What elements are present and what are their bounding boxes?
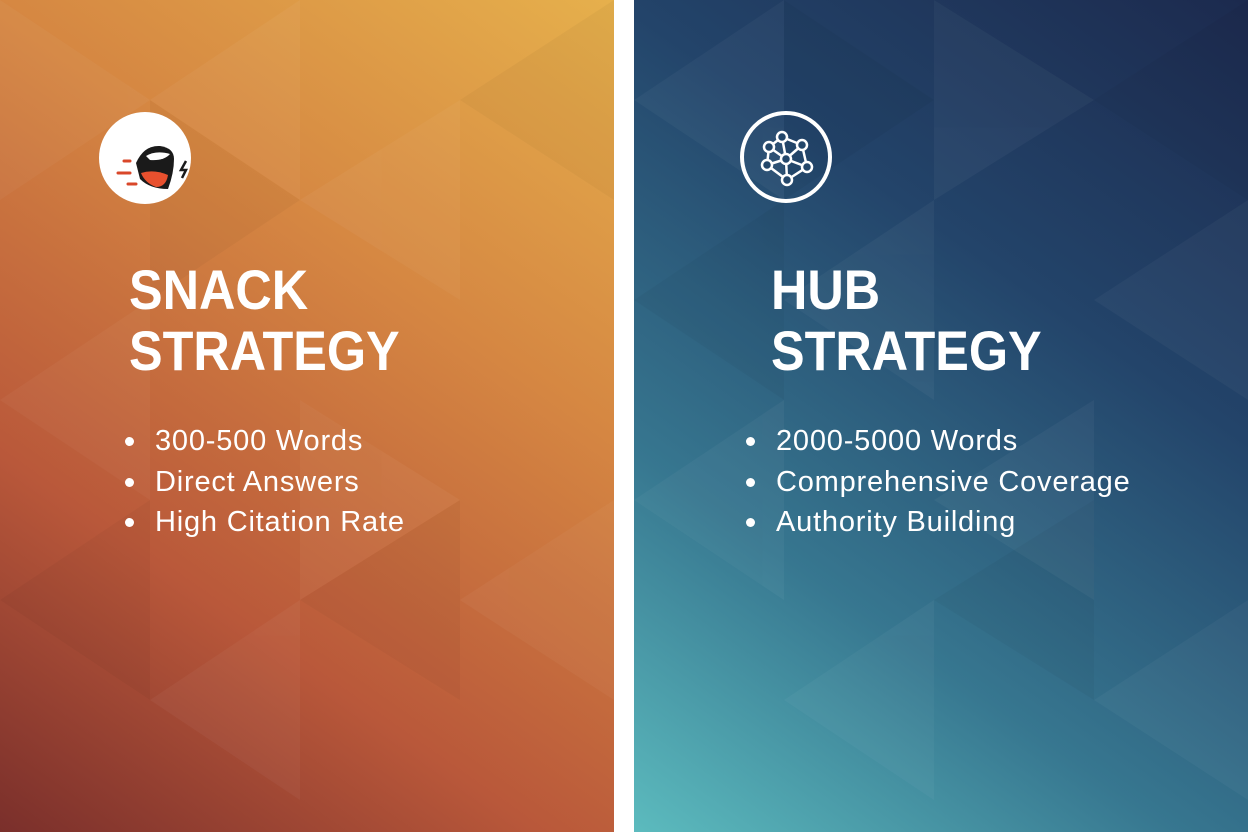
bullet list: snack: 300-500 Words bbox=[155, 425, 363, 457]
heading: snack strategy: SNACK bbox=[129, 258, 308, 321]
heading: snack strategy: STRATEGY bbox=[129, 319, 400, 382]
bullet list: hub: Authority Building bbox=[776, 506, 1016, 538]
panel: snack strategy bbox=[0, 0, 614, 832]
heading: hub strategy: HUB bbox=[771, 258, 880, 321]
bullet list: hub: 2000-5000 Words bbox=[776, 425, 1018, 457]
bullet list: hub bbox=[746, 425, 1130, 538]
bullet list: snack: High Citation Rate bbox=[155, 506, 405, 538]
bullet list: hub: Comprehensive Coverage bbox=[776, 466, 1130, 498]
heading: snack strategy bbox=[129, 258, 400, 382]
icon: network bbox=[740, 111, 832, 203]
heading: hub strategy: STRATEGY bbox=[771, 319, 1042, 382]
bullet list: snack: Direct Answers bbox=[155, 466, 360, 498]
bullet list: snack bbox=[125, 425, 405, 538]
icon: mouth bbox=[99, 112, 191, 204]
panel: hub strategy bbox=[634, 0, 1248, 832]
heading: hub strategy bbox=[771, 258, 1042, 382]
